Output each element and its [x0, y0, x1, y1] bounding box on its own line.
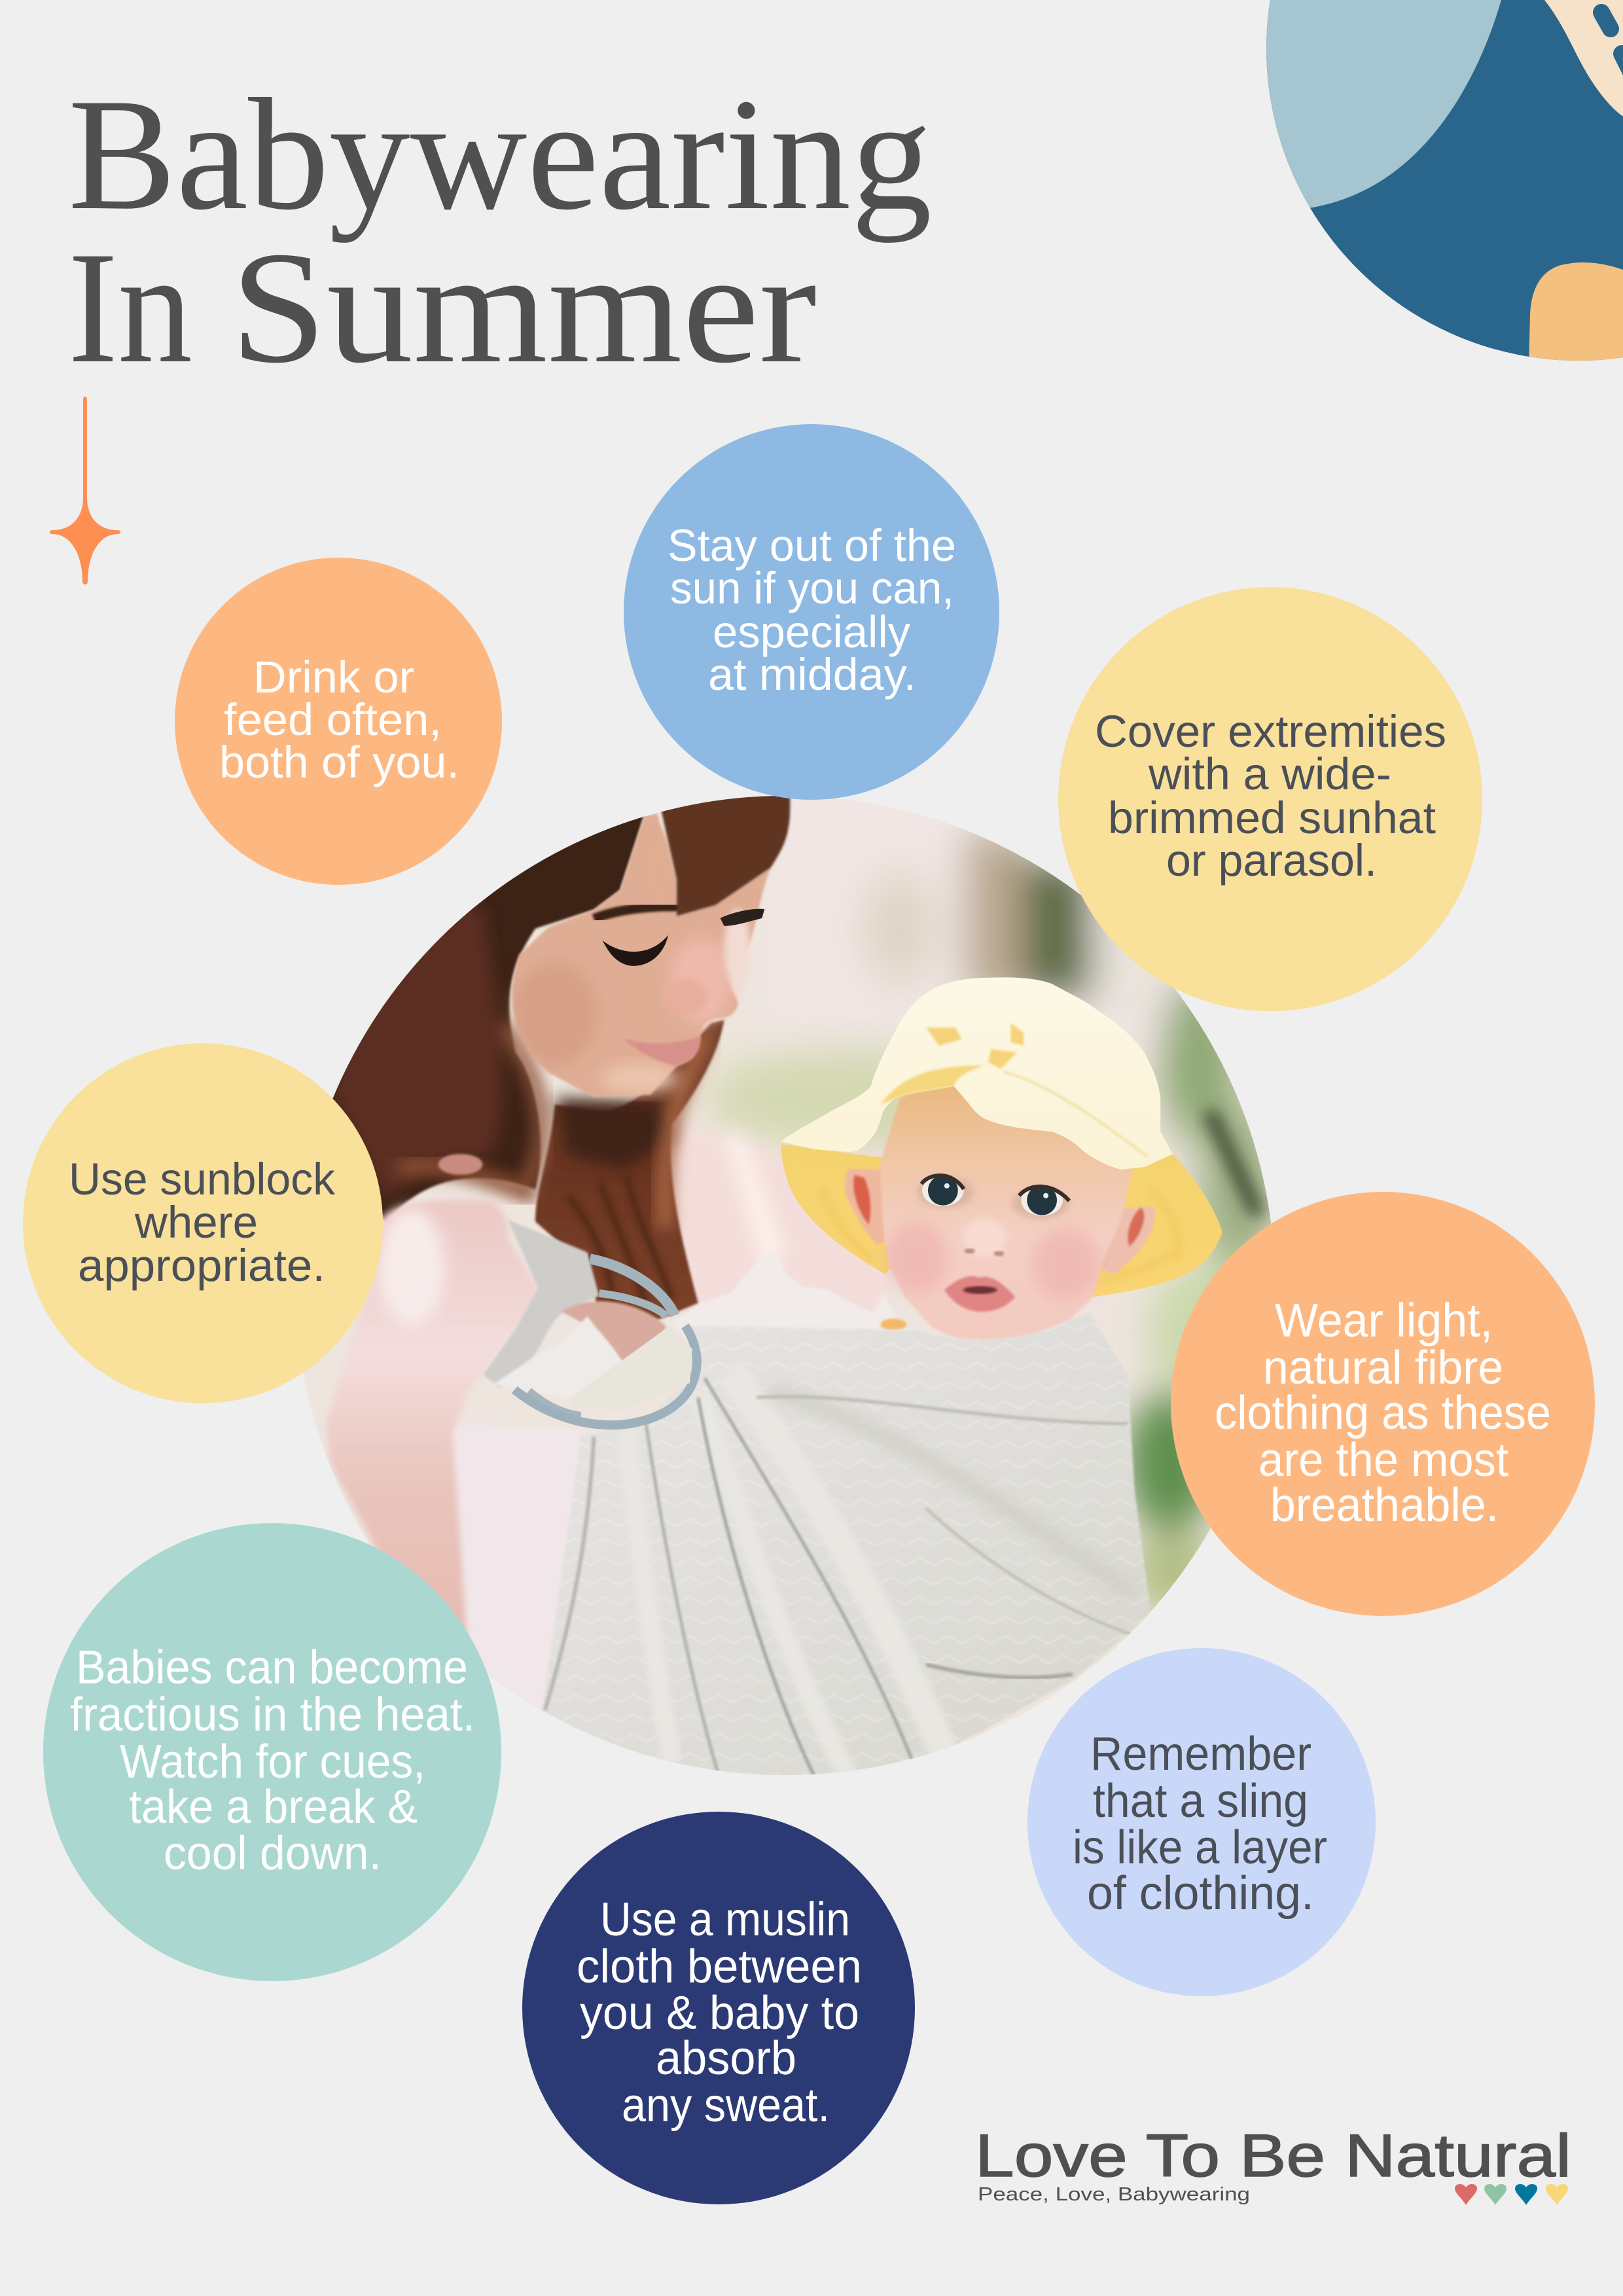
baby face — [880, 1079, 1133, 1340]
title: Babywearing — [68, 65, 932, 243]
tip circle: cover extremities: with a wide- — [1148, 749, 1391, 799]
sling folds — [545, 1371, 1144, 1778]
tip circle: babies can become fractious: fractious in the heat. — [70, 1689, 475, 1741]
tip circle: muslin cloth: Use a muslin — [600, 1893, 850, 1946]
tip circle: babies can become fractious: Babies can become — [76, 1641, 468, 1694]
tip circle: drink or feed often: feed often, — [224, 694, 442, 745]
baby eyes — [921, 1175, 1069, 1216]
tip circle: drink or feed often: Drink or — [253, 652, 414, 702]
baby dress flower — [880, 1319, 906, 1331]
tip circle: sling is a layer of clothing — [1027, 1648, 1376, 1996]
tip circle: stay out of the sun: Stay out of the — [668, 520, 956, 571]
baby hat top — [781, 977, 1173, 1170]
tip circle: muslin cloth: you & baby to — [580, 1987, 859, 2039]
tip circle: sling is a layer of clothing: is like a layer — [1073, 1821, 1327, 1874]
tip circle: sling is a layer of clothing: of clothing. — [1087, 1867, 1314, 1920]
logo: Love To Be Natural — [975, 2123, 1571, 2205]
tip circle: muslin cloth: cloth between — [577, 1941, 862, 1993]
tip circle: wear light natural fibre: breathable. — [1270, 1479, 1499, 1532]
baby nose and mouth — [944, 1219, 1015, 1312]
tip circle: wear light natural fibre: are the most — [1258, 1434, 1508, 1486]
tip circle: use sunblock: where — [134, 1197, 258, 1247]
tip circle: wear light natural fibre: Wear light, — [1275, 1295, 1493, 1347]
tip circle: sling is a layer of clothing: Remember — [1090, 1728, 1311, 1780]
icon: orange star with stem — [50, 397, 120, 584]
tip circle: cover extremities: brimmed sunhat — [1108, 793, 1436, 843]
tip circle: wear light natural fibre: clothing as these — [1215, 1387, 1551, 1439]
tip circle: stay out of the sun: sun if you can, — [670, 563, 954, 613]
decorative corner shape — [1257, 0, 1623, 367]
tip circle: use sunblock: Use sunblock — [69, 1154, 335, 1204]
tip circle: wear light natural fibre: natural fibre — [1263, 1342, 1503, 1394]
logo tagline: Peace, Love, Babywearing — [978, 2184, 1250, 2205]
title: In — [68, 219, 192, 396]
tip circle: muslin cloth: absorb — [656, 2032, 796, 2085]
mother's hand and arm — [326, 1154, 538, 1638]
tip circle: cover extremities: Cover extremities — [1095, 706, 1446, 757]
title: Summer — [230, 219, 817, 396]
tip circle: stay out of the sun — [624, 424, 999, 800]
tip circle: muslin cloth — [522, 1812, 915, 2204]
chest and shoulder — [713, 1132, 880, 1258]
mother's lips — [622, 1036, 701, 1066]
tip circle: babies can become fractious: cool down. — [164, 1827, 382, 1880]
baby hat underside — [781, 1144, 1222, 1297]
tip circle: use sunblock: appropriate. — [78, 1240, 325, 1291]
tip circle: use sunblock — [23, 1043, 383, 1403]
tip circle: drink or feed often — [175, 558, 502, 885]
logo hearts — [1455, 2184, 1568, 2205]
baby ears — [845, 1169, 1155, 1274]
tip circle: stay out of the sun: at midday. — [708, 649, 916, 700]
mother's hair — [308, 785, 724, 1319]
sling fabric — [542, 1313, 1150, 1788]
tip circle: babies can become fractious: Watch for cues, — [120, 1736, 425, 1788]
tip circle: cover extremities: or parasol. — [1166, 835, 1377, 886]
tip circle: drink or feed often: both of you. — [219, 737, 459, 787]
lower dress — [446, 1424, 588, 1717]
sling shoulder tail and lace — [483, 1220, 666, 1397]
photo: mother wearing baby in a ring sling — [275, 772, 1296, 1793]
mother's fringe — [657, 785, 790, 916]
tip circle: muslin cloth: any sweat. — [622, 2079, 830, 2132]
tip circle: wear light natural fibre — [1171, 1192, 1595, 1616]
mother's eyes and brow — [594, 906, 764, 966]
tip circle: stay out of the sun: especially — [713, 607, 910, 657]
tip circle: sling is a layer of clothing: that a sling — [1093, 1775, 1308, 1827]
lace at neckline — [674, 1259, 895, 1339]
tip circle: cover extremities — [1058, 587, 1482, 1011]
sling rings — [514, 1259, 697, 1425]
logo: Love To Be Natural: Love To Be Natural — [975, 2123, 1571, 2189]
mother's face — [512, 785, 790, 1098]
tip circle: babies can become fractious: take a break & — [129, 1781, 418, 1833]
tip circle: babies can become fractious — [43, 1523, 501, 1981]
title — [68, 65, 932, 396]
